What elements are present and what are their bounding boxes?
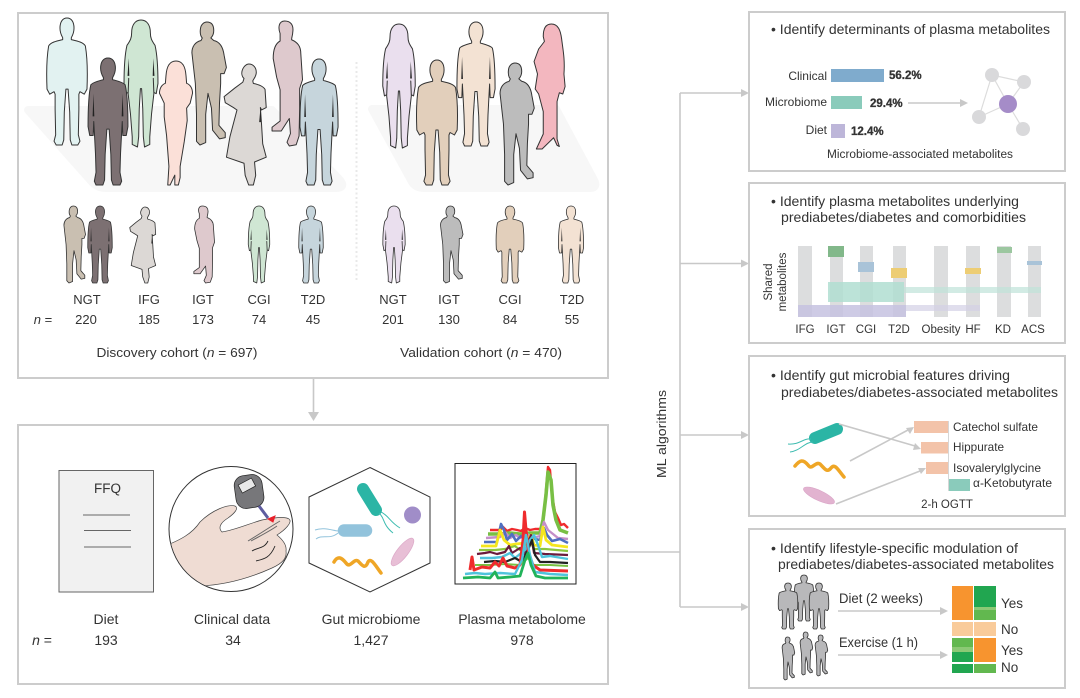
discovery cohort labels: Discovery cohort ( n = 697) — [96, 345, 258, 360]
panel: gut microbial features — [749, 356, 1065, 516]
validation cohort labels: Validation cohort ( n = 470) — [400, 345, 562, 360]
heading — [771, 367, 1058, 400]
discovery cohort labels: 173 — [192, 312, 214, 327]
floor: discovery — [28, 110, 342, 188]
chart: shared metabolites: IGT — [826, 324, 846, 336]
validation cohort large figures — [383, 22, 565, 185]
icon: gut microbes hexagon — [309, 468, 430, 592]
discovery cohort labels: NGT — [73, 292, 101, 307]
validation cohort labels: 55 — [565, 312, 579, 327]
heading: prediabetes/diabetes-associated metabolites — [781, 384, 1058, 400]
validation cohort labels: T2D — [560, 292, 584, 307]
heading — [771, 193, 1026, 225]
arrows with intervention labels: Exercise (1 h) — [839, 635, 918, 650]
label: ML algorithms: ML algorithms — [654, 389, 669, 478]
bar chart: metabolite associations: Catechol sulfate — [953, 420, 1038, 434]
ML algorithms connector — [608, 89, 749, 611]
icons: microbes — [788, 429, 844, 507]
discovery cohort labels: IGT — [192, 292, 214, 307]
validation cohort labels: IGT — [438, 292, 460, 307]
validation cohort labels: 84 — [503, 312, 517, 327]
discovery cohort labels: 220 — [75, 312, 97, 327]
discovery cohort labels: n = — [34, 312, 52, 327]
discovery cohort labels: 74 — [252, 312, 266, 327]
panel: metabolites underlying prediabetes and comorbidities — [749, 183, 1065, 343]
heatmap: Yes — [1001, 643, 1023, 658]
bar chart: variance explained: 12.4% — [851, 126, 884, 138]
network of metabolites — [972, 68, 1031, 136]
caption: Microbiome-associated metabolites — [827, 149, 1013, 161]
discovery cohort labels — [34, 292, 325, 360]
chart: shared metabolites: metabolites — [777, 252, 789, 311]
data type labels and counts: Diet — [94, 611, 119, 627]
chart: shared metabolites — [763, 246, 1045, 336]
chart: shared metabolites: CGI — [856, 324, 876, 336]
heading: • Identify plasma metabolites underlying — [771, 193, 1019, 209]
connector: cohorts to data — [308, 378, 319, 421]
divider between cohorts — [356, 62, 358, 282]
bar chart: variance explained: Clinical — [788, 69, 827, 83]
discovery cohort labels: CGI — [247, 292, 271, 307]
heading — [771, 540, 1054, 572]
panel: data types — [18, 425, 608, 684]
heading: prediabetes/diabetes and comorbidities — [781, 209, 1026, 225]
bar chart: variance explained: 56.2% — [889, 70, 922, 82]
bar chart: variance explained: Microbiome — [765, 95, 827, 109]
discovery cohort large figures — [47, 18, 338, 185]
bar chart: variance explained: 29.4% — [870, 98, 903, 110]
bar chart: metabolite associations: Isovalerylglycine — [953, 461, 1041, 475]
glucose meter — [233, 473, 265, 510]
discovery cohort small figures — [64, 206, 323, 283]
data type labels and counts — [32, 611, 586, 648]
heading: prediabetes/diabetes-associated metabolites — [778, 556, 1054, 572]
data type labels and counts: n = — [32, 632, 52, 648]
bar chart: metabolite associations: 2-h OGTT — [921, 499, 973, 511]
data type labels and counts: Gut microbiome — [322, 611, 421, 627]
heatmap: Yes — [1001, 596, 1023, 611]
floor: validation — [372, 109, 595, 188]
diet group figures — [778, 575, 829, 629]
bar chart: variance explained — [765, 69, 922, 138]
validation cohort labels: 130 — [438, 312, 460, 327]
panel: cohorts — [18, 13, 608, 378]
chart: shared metabolites: KD — [995, 324, 1011, 336]
data type labels and counts: 193 — [94, 632, 118, 648]
heading: • Identify gut microbial features driving — [771, 367, 1010, 383]
chart: shared metabolites: HF — [965, 324, 981, 336]
heatmap — [952, 586, 1023, 675]
chart: shared metabolites: Shared — [763, 263, 775, 301]
arrows with intervention labels: Diet (2 weeks) — [839, 591, 923, 606]
chart: shared metabolites: T2D — [888, 324, 910, 336]
validation cohort labels: NGT — [379, 292, 407, 307]
chart: stacked metabolome spectra — [455, 464, 576, 584]
chart: shared metabolites: ACS — [1021, 324, 1045, 336]
chart: shared metabolites: IFG — [795, 324, 815, 336]
icon: FFQ form — [59, 470, 154, 592]
validation cohort small figures — [383, 206, 584, 283]
heatmap: No — [1001, 660, 1018, 675]
discovery cohort labels: IFG — [138, 292, 160, 307]
validation cohort labels — [379, 292, 584, 360]
bar chart: metabolite associations — [914, 420, 1052, 511]
heatmap: No — [1001, 622, 1018, 637]
validation cohort labels: 201 — [382, 312, 404, 327]
validation cohort labels: CGI — [498, 292, 522, 307]
bar chart: metabolite associations: Hippurate — [953, 440, 1004, 454]
heading: • Identify lifestyle-specific modulation of — [771, 540, 1018, 556]
arrow — [908, 99, 968, 107]
data type labels and counts: Plasma metabolome — [458, 611, 586, 627]
heading: • Identify determinants of plasma metabolites — [771, 21, 1050, 37]
chart: shared metabolites: Obesity — [922, 324, 961, 336]
icon: FFQ form: FFQ — [94, 481, 121, 496]
data type labels and counts: 34 — [225, 632, 241, 648]
arrows: microbes to metabolites — [836, 424, 926, 504]
discovery cohort labels: 45 — [306, 312, 320, 327]
data type labels and counts: Clinical data — [194, 611, 270, 627]
discovery cohort labels: 185 — [138, 312, 160, 327]
data type labels and counts: 1,427 — [353, 632, 389, 648]
bar chart: metabolite associations: α-Ketobutyrate — [973, 476, 1052, 490]
bar chart: variance explained: Diet — [806, 123, 828, 137]
data type labels and counts: 978 — [510, 632, 534, 648]
exercise group figures — [782, 632, 828, 680]
arrows with intervention labels — [838, 591, 948, 659]
icon: finger-prick glucose test — [165, 466, 293, 592]
panel: determinants of plasma metabolites — [749, 12, 1065, 171]
panel: lifestyle modulation — [749, 529, 1065, 688]
discovery cohort labels: T2D — [301, 292, 325, 307]
